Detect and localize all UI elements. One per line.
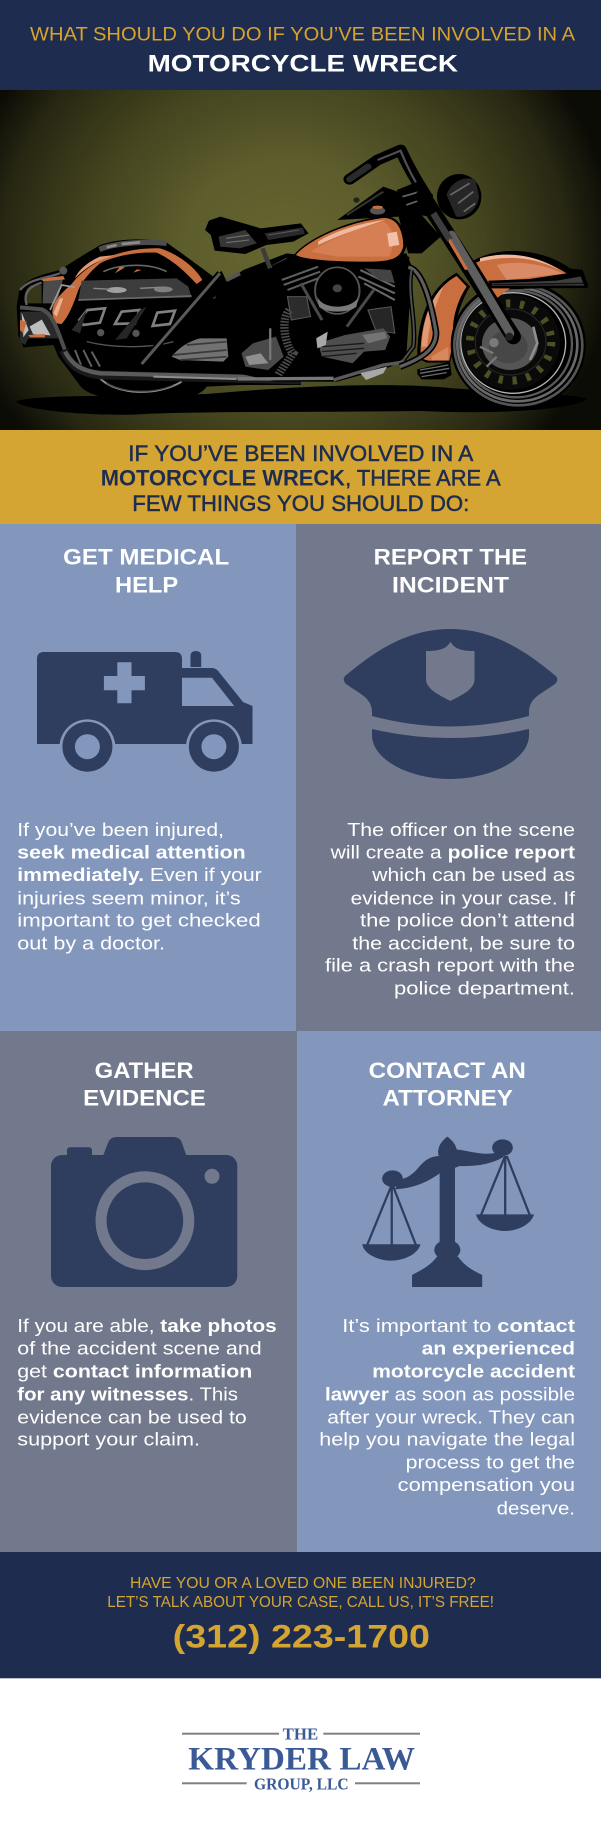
body text [325,819,576,998]
chrome rail [99,242,167,249]
title: MOTORCYCLE WRECK [148,51,458,78]
panel: contact an attorney [297,1031,601,1552]
intro line 3: FEW THINGS YOU SHOULD DO: [132,491,469,516]
heading: ATTORNEY [382,1086,513,1111]
icon: scales of justice [362,1137,534,1287]
heading: GET MEDICAL [63,545,229,570]
body text: help you navigate the legal [319,1429,575,1450]
heading: CONTACT AN [369,1058,526,1083]
engine mass [215,253,412,382]
seat post [263,248,270,268]
body text: seek medical attention [17,841,246,862]
phone number: (312) 223-1700 [173,1619,430,1655]
air cleaner [315,267,360,314]
icon: camera [51,1137,237,1287]
cylinder fins [282,267,320,290]
banner: intro statement [0,430,601,524]
frame downtube [399,262,407,353]
body text: after your wreck. They can [327,1406,575,1427]
heading: INCIDENT [392,573,509,598]
body text: out by a doctor. [17,932,165,953]
saddlebag [78,278,192,300]
icon: ambulance [37,651,252,772]
body text: process to get the [406,1451,575,1472]
body text: motorcycle accident [372,1361,575,1382]
fender orange [52,248,202,324]
call to action banner [0,1552,601,1678]
frame to neck [337,187,441,253]
body text: an experienced [422,1337,575,1358]
body text: evidence in your case. If [351,887,576,908]
lower frame [333,360,418,380]
body text [319,1315,575,1518]
body text: immediately. Even if your [17,864,262,885]
tail light details [20,312,58,345]
rear wheel ring [100,378,182,392]
panel: get medical help [0,524,296,1031]
header banner [0,0,601,90]
body text: police department. [394,977,575,998]
panel: report the incident [296,524,601,1031]
heading: REPORT THE [374,545,527,570]
body text: the accident, be sure to [352,932,575,953]
carrier cutouts [24,285,42,303]
center engine bits [248,284,267,328]
body text: lawyer as soon as possible [325,1383,575,1404]
orange sliver [490,288,510,298]
front half of bike [399,197,589,409]
fuel tank [293,216,406,263]
interior details [103,265,167,272]
logo: the kryder law group: KRYDER LAW [188,1741,415,1777]
heading [63,545,229,598]
body text: important to get checked [17,910,261,931]
logo: the kryder law group: GROUP, LLC [254,1774,349,1793]
body text: of the accident scene and [17,1337,262,1358]
crankcase [318,328,390,363]
footboard [417,362,452,379]
body text: It’s important to contact [342,1315,575,1336]
exhaust extension [238,373,333,384]
body text: injuries seem minor, it’s [17,887,241,908]
rear half of bike [17,239,301,401]
silhouette [17,239,301,401]
heading [83,1058,206,1111]
cta line 1: HAVE YOU OR A LOVED ONE BEEN INJURED? [130,1575,476,1592]
body text [17,819,262,953]
rim and spokes [461,294,560,390]
heading [374,545,527,598]
ground shadow [16,385,587,415]
body text: the police don’t attend [360,910,575,931]
body text [17,1315,277,1450]
logo: the kryder law group [182,1724,420,1793]
frame detail [347,192,383,215]
intro line 2: MOTORCYCLE WRECK, THERE ARE A [101,466,501,491]
body text: which can be used as [371,864,575,885]
panel: motorcycle illustration [0,90,601,430]
handlebar [350,150,425,195]
fender lower [417,273,470,363]
seat [205,217,309,254]
middle of bike: seat, tank, engine, frame [205,150,481,382]
body text: support your claim. [17,1429,200,1450]
strut [142,273,220,364]
headstock [397,182,433,217]
hub [482,318,538,370]
heading: GATHER [95,1058,194,1083]
body text: for any witnesses . This [17,1383,238,1404]
body text: If you are able, take photos [17,1315,277,1336]
heading: EVIDENCE [83,1086,206,1111]
intro line 1: IF YOU’VE BEEN INVOLVED IN A [128,441,474,466]
header line: question: WHAT SHOULD YOU DO IF YOU’VE BEEN INVOLVED IN A [30,24,575,46]
exhaust [63,350,301,380]
fender upper [473,251,589,290]
side cover [172,338,228,362]
headlight [437,174,481,219]
rail [490,275,586,287]
logo: the kryder law group: THE [283,1724,318,1743]
heading: HELP [115,573,178,598]
body text: deserve. [497,1497,575,1518]
body text: evidence can be used to [17,1406,247,1427]
heading [369,1058,526,1111]
body text: will create a police report [330,841,575,862]
gear coil [278,310,293,375]
front tyre [451,281,586,409]
panel: gather evidence [0,1031,297,1552]
body text: The officer on the scene [347,819,575,840]
icon: police hat [344,629,557,779]
crash bar [400,267,436,367]
body text: compensation you [398,1474,575,1495]
fork [423,197,513,337]
body text: If you’ve been injured, [17,819,224,840]
primary [241,337,284,370]
body text: file a crash report with the [325,955,575,976]
v rods [301,283,374,327]
cta line 2: LET’S TALK ABOUT YOUR CASE, CALL US, IT’S FREE! [107,1594,494,1611]
body text: get contact information [17,1361,252,1382]
